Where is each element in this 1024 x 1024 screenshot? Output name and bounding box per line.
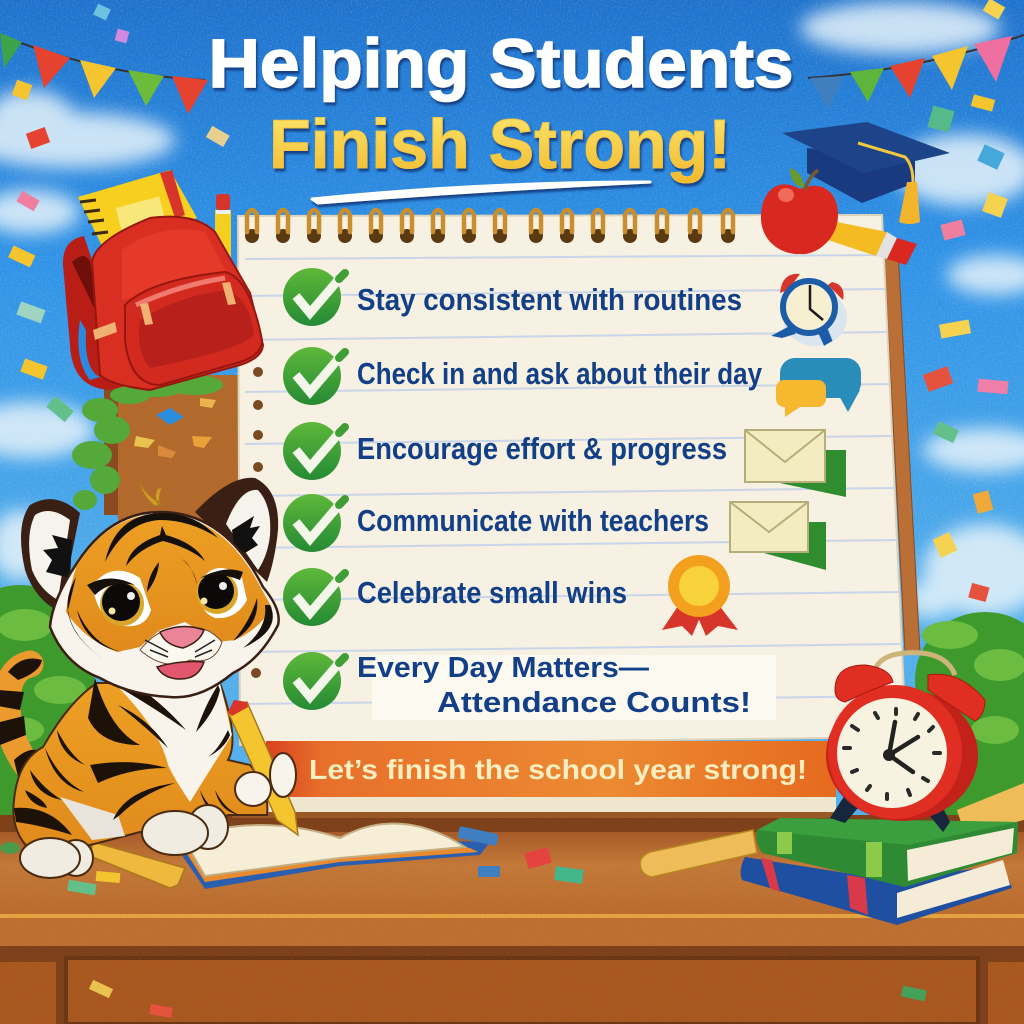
- item: communicate: Communicate with teachers: [357, 503, 709, 538]
- tiger muzzle: [140, 626, 222, 679]
- tiger head: [50, 512, 279, 697]
- notepad page: [238, 215, 906, 745]
- apple: [761, 168, 838, 254]
- tiger rear paw: [20, 838, 93, 878]
- green book: [756, 818, 1018, 887]
- bunting left: [0, 33, 208, 114]
- icon: blue alarm clock: [777, 274, 847, 346]
- ruler: [640, 783, 1024, 877]
- tiger: [0, 478, 298, 878]
- tiger pencil: [228, 700, 298, 835]
- item: attendance: Attendance Counts!: [437, 687, 751, 719]
- backpack: [63, 170, 263, 390]
- tiger face orange: [66, 514, 272, 652]
- blue book: [741, 857, 1012, 925]
- item: celebrate: Celebrate small wins: [357, 575, 627, 610]
- title: [208, 25, 794, 203]
- checklist: [283, 268, 776, 720]
- open book: [90, 823, 499, 889]
- item: routines: Stay consistent with routines: [357, 282, 742, 317]
- tiger tail: [0, 658, 42, 785]
- tiger stripes: [14, 678, 240, 835]
- notebook in backpack: [78, 170, 197, 248]
- bunting right: [808, 35, 1024, 110]
- title: Finish Strong!: [269, 105, 731, 183]
- banner: [266, 741, 836, 797]
- graduation cap: [782, 122, 950, 224]
- tiger ears: [21, 499, 80, 612]
- item: encourage: Encourage effort & progress: [357, 431, 727, 466]
- desk confetti: [0, 842, 927, 1018]
- spiral binding: [245, 210, 735, 243]
- item: check in: Check in and ask about their day: [357, 356, 763, 391]
- title: Helping Students: [208, 25, 794, 102]
- tiger front paw: [142, 805, 228, 855]
- desk: [0, 815, 1024, 1024]
- stack of books: [741, 818, 1018, 925]
- item: encourage: [283, 422, 727, 480]
- tiger chest: [118, 683, 232, 802]
- item: celebrate: [283, 568, 627, 626]
- pencil behind apple: [828, 222, 917, 265]
- banner: Let’s finish the school year strong!: [309, 754, 807, 785]
- tiger body: [13, 683, 267, 850]
- icon: envelope one: [745, 430, 846, 497]
- tiger face stripes: [67, 513, 273, 665]
- tiger eyes: [87, 568, 247, 626]
- pencil in backpack: [215, 194, 231, 280]
- item: attendance: Every Day Matters—: [357, 652, 649, 684]
- icon: envelope two: [730, 502, 826, 570]
- ivy on corkboard: [72, 375, 223, 510]
- item: routines: [283, 268, 742, 326]
- icon: speech bubbles: [776, 358, 861, 417]
- clouds: [0, 2, 1024, 618]
- icon: award ribbon: [662, 555, 738, 636]
- tiger fur tuft: [140, 482, 162, 506]
- bushes: [0, 585, 1024, 820]
- item: attendance: [283, 652, 776, 720]
- red alarm clock: [826, 653, 985, 832]
- corkboard: [104, 250, 920, 818]
- confetti: [8, 0, 1008, 602]
- item: check in: [283, 347, 763, 405]
- tiger hand paw: [235, 753, 296, 806]
- tiger belly: [60, 797, 125, 840]
- item: communicate: [283, 494, 709, 552]
